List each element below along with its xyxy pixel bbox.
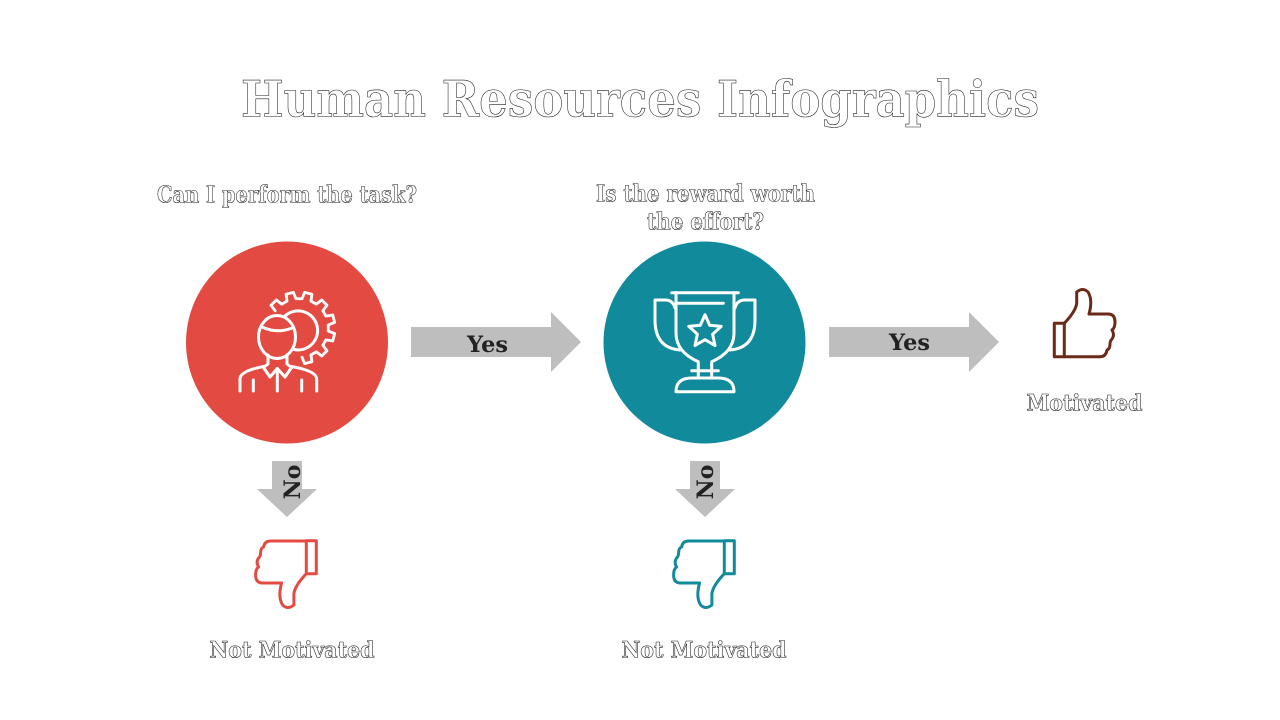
teal circle with trophy icon	[604, 242, 806, 444]
arrow: yes to reward question: Yes	[466, 332, 508, 358]
arrow: no from second circle: No	[693, 465, 719, 499]
icon: thumbs up	[1054, 290, 1115, 357]
label: not motivated, first: Not Motivated	[210, 638, 374, 664]
label: motivated: Motivated	[1026, 390, 1142, 416]
red circle with person and gear icon	[186, 242, 388, 444]
icon: thumbs down teal	[674, 541, 734, 608]
question: is the reward worth the effort: Is the reward worth	[596, 180, 815, 208]
arrow: yes to motivated	[829, 312, 999, 372]
arrow: yes to reward question	[411, 312, 581, 372]
question: is the reward worth the effort	[596, 180, 815, 236]
arrow: no from second circle	[675, 461, 735, 517]
title: Human Resources Infographics	[241, 70, 1039, 128]
arrow: no from first circle	[257, 461, 317, 517]
question: is the reward worth the effort: the effort?	[647, 208, 764, 236]
icon: thumbs down red	[256, 541, 316, 608]
question: can I perform the task: Can I perform the task?	[157, 182, 417, 208]
label: not motivated, second: Not Motivated	[622, 638, 786, 664]
arrow: yes to motivated: Yes	[888, 330, 930, 356]
arrow: no from first circle: No	[280, 465, 306, 499]
